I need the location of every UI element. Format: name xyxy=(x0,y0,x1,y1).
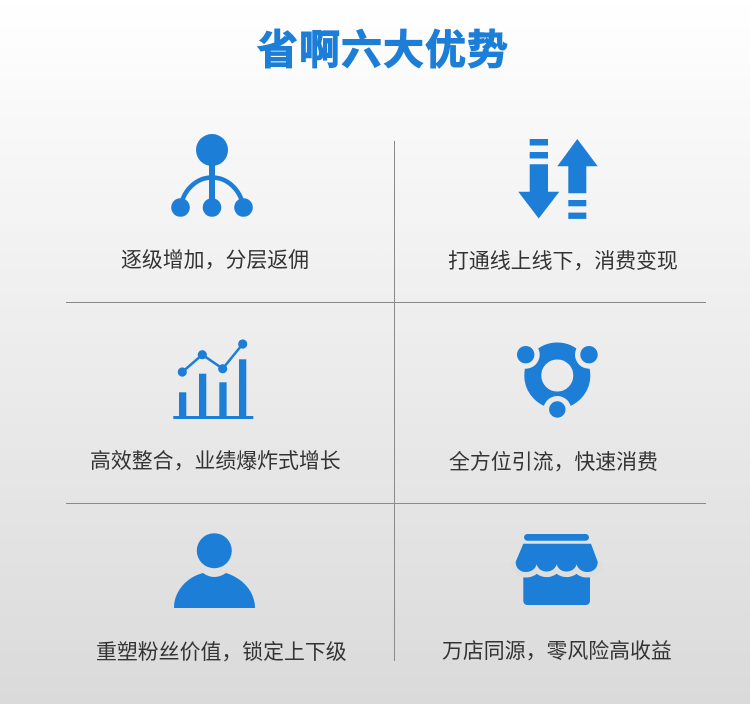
icon: ring with three satellites xyxy=(512,341,603,424)
title: 省啊六大优势 xyxy=(257,27,509,73)
text: online and offline: 打通线上线下，消费变现 xyxy=(448,245,678,275)
text: all-round traffic: 全方位引流，快速消费 xyxy=(449,446,658,476)
text: reshape fan value: 重塑粉丝价值，锁定上下级 xyxy=(96,636,347,666)
icon: hierarchy tree xyxy=(171,134,253,217)
text: same store, zero risk: 万店同源，零风险高收益 xyxy=(442,635,672,665)
text: tiered rebates: 逐级增加，分层返佣 xyxy=(121,244,309,274)
icon: up and down arrows xyxy=(518,139,598,219)
icon: bar chart with trend line xyxy=(173,339,253,419)
text: efficient integration: 高效整合，业绩爆炸式增长 xyxy=(90,445,341,475)
icon: storefront xyxy=(516,534,598,605)
icon: person xyxy=(174,533,255,608)
